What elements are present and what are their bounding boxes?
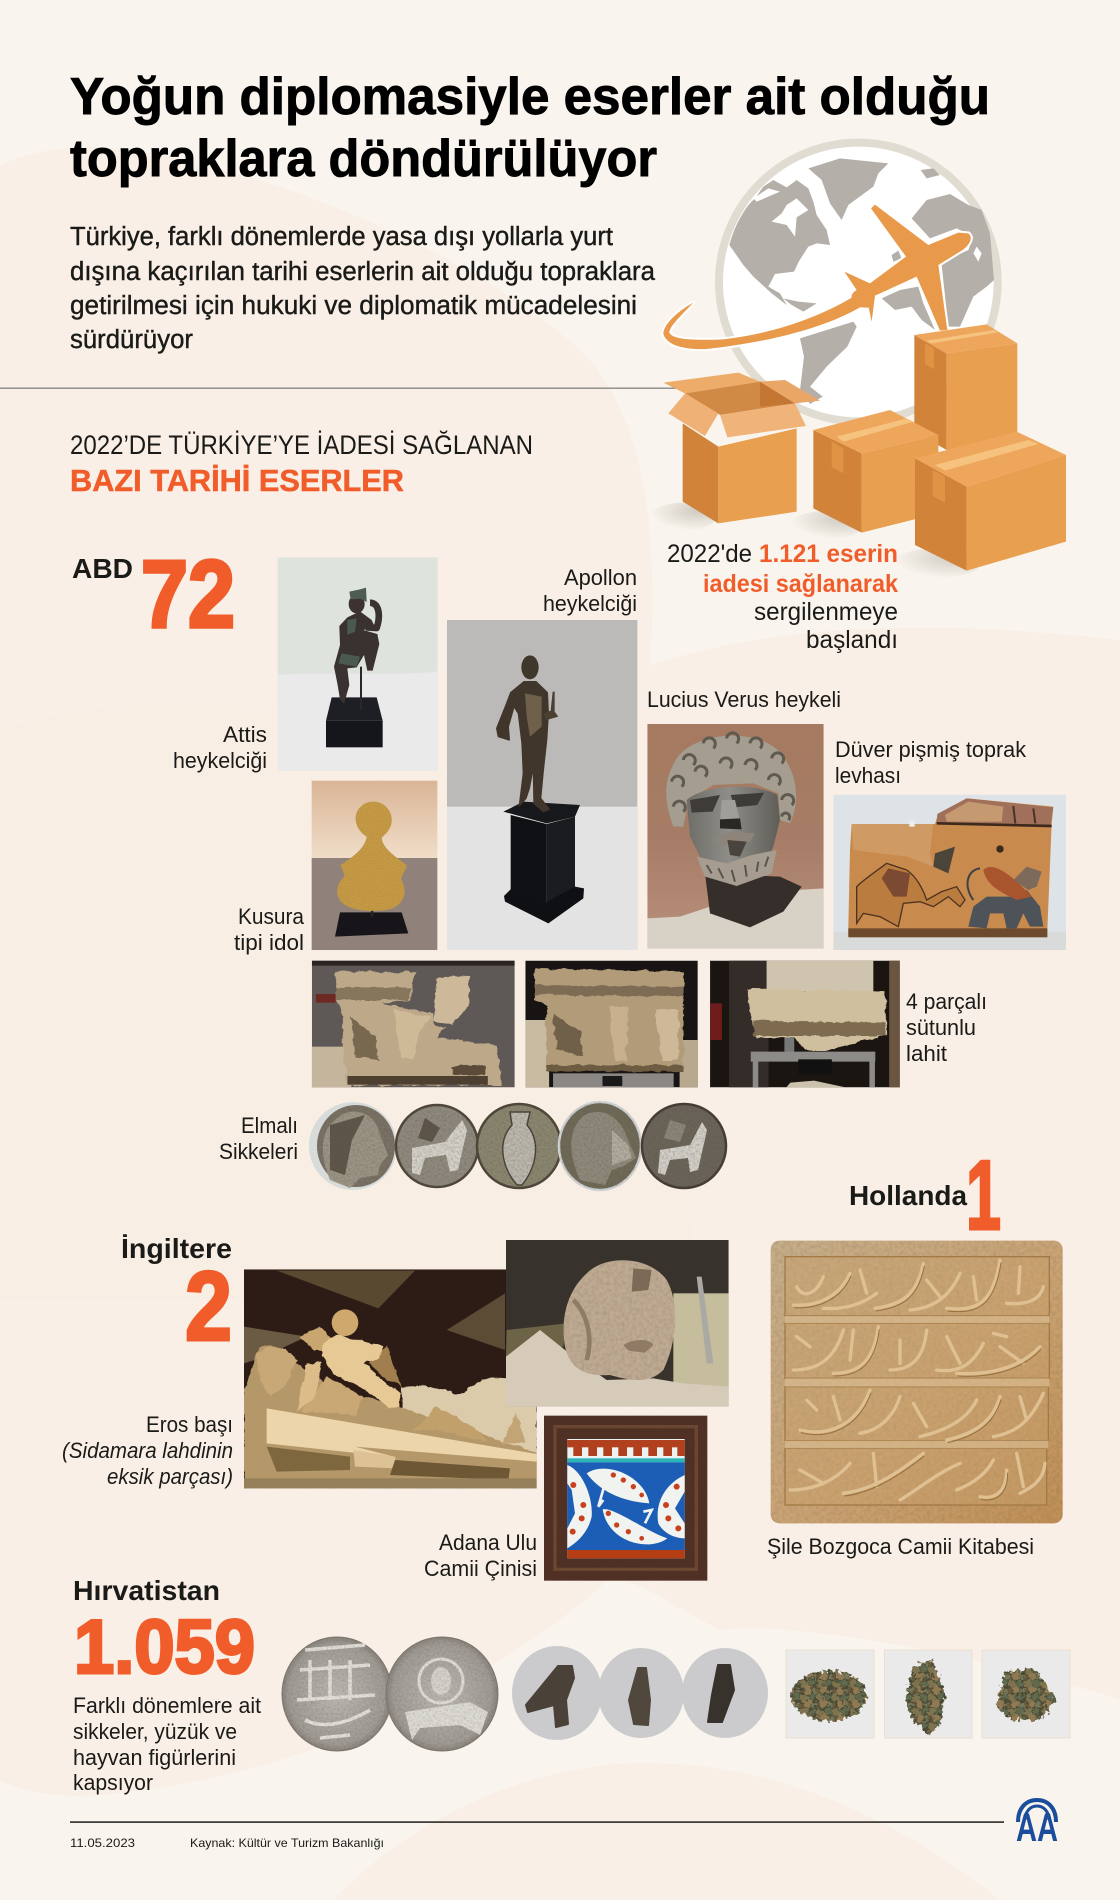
- label: Attis: [173, 722, 267, 773]
- icon: middle box: [813, 410, 938, 533]
- label: 4-piece sarcophagus: lahit: [906, 1041, 948, 1066]
- icon: AA logo: [1016, 1800, 1058, 1850]
- callout: 1.121 works: 2022'de: [667, 540, 752, 568]
- title: Yoğun diplomasiyle eserler ait olduğu: [70, 68, 990, 126]
- label: Elmalı coins: Sikkeleri: [219, 1139, 298, 1164]
- photo: sarcophagus fragment 2: [525, 961, 698, 1087]
- ABD count: ABD: [72, 553, 133, 584]
- coin 1: [309, 1102, 397, 1190]
- label: Apollon: [543, 565, 637, 616]
- label: Adana tile: Adana Ulu: [439, 1530, 537, 1555]
- coin 4: [559, 1102, 641, 1190]
- intro text: sürdürüyor: [70, 326, 194, 354]
- label: Düver plaque: Düver pişmiş toprak: [835, 737, 1027, 762]
- photo: silver coins: [282, 1637, 498, 1751]
- ABD count: [72, 541, 235, 648]
- label: Eros head: eksik parçası): [107, 1464, 233, 1489]
- title: topraklara döndürülüyor: [70, 130, 657, 188]
- Hollanda count: [849, 1140, 1001, 1250]
- photo: Şile Bozgoca mosque inscription: [771, 1241, 1063, 1523]
- intro text: getirilmesi için hukuki ve diplomatik mücadelesini: [70, 292, 637, 320]
- photo: Apollon statuette: [447, 620, 637, 950]
- text: Hırvatistan description: [73, 1693, 262, 1795]
- photo: Attis statuette: [278, 557, 438, 771]
- text: Hırvatistan description: sikkeler, yüzük ve: [73, 1719, 237, 1744]
- callout: 1.121 works: başlandı: [806, 626, 898, 654]
- label: Adana tile: Camii Çinisi: [424, 1556, 537, 1581]
- title: [70, 68, 990, 188]
- label: 4-piece sarcophagus: [906, 989, 987, 1066]
- photo: Lucius Verus head: [647, 724, 824, 949]
- İngiltere count: 2: [185, 1251, 232, 1361]
- inscription calligraphy: [790, 1260, 1045, 1500]
- illustration: globe, plane and boxes: [650, 143, 1066, 578]
- photo: Sidamara sarcophagus: [244, 1269, 537, 1488]
- text: Hırvatistan description: Farklı dönemlere ait: [73, 1693, 262, 1718]
- callout: 1.121 works: [667, 540, 898, 654]
- label: Kusura idol: tipi idol: [234, 930, 304, 955]
- label: Kusura idol: [234, 904, 304, 955]
- text: Hırvatistan description: kapsıyor: [73, 1770, 153, 1795]
- photo: sarcophagus fragment 1: [312, 961, 515, 1087]
- label: Attis: heykelciği: [173, 748, 267, 773]
- footer line: [70, 1821, 1004, 1823]
- photo: Kusura idol: [312, 781, 437, 950]
- callout: 1.121 works: sergilenmeye: [754, 598, 898, 626]
- icon: AA logo: AA: [1016, 1806, 1058, 1850]
- label: Eros head: (Sidamara lahdinin: [62, 1438, 233, 1463]
- label: Apollon: heykelciği: [543, 591, 637, 616]
- icon: tall box: [914, 324, 1017, 450]
- coin 5: [642, 1104, 726, 1188]
- label: Elmalı coins: Elmalı: [241, 1113, 298, 1138]
- label: Şile Bozgoca: Şile Bozgoca Camii Kitabesi: [767, 1534, 1034, 1559]
- coin 3: [477, 1104, 561, 1188]
- section heading: BAZI TARİHİ ESERLER: [70, 463, 404, 498]
- label: 4-piece sarcophagus: 4 parçalı: [906, 989, 987, 1014]
- label: Kusura idol: Kusura: [238, 904, 304, 929]
- photo: Düver terracotta plaque: [833, 795, 1066, 950]
- photo group: Elmalı coins: [309, 1102, 726, 1190]
- text: Hırvatistan description: hayvan figürlerini: [73, 1745, 236, 1770]
- photo: animal figurines: [512, 1646, 768, 1740]
- callout: 1.121 works: iadesi sağlanarak: [703, 570, 898, 598]
- label: Apollon: Apollon: [564, 565, 637, 590]
- photo group: 4-piece columned sarcophagus: [312, 961, 900, 1087]
- Hollanda count: Hollanda: [849, 1180, 967, 1211]
- footer: source: Kaynak: Kültür ve Turizm Bakanlığı: [190, 1836, 384, 1850]
- divider line: [0, 388, 690, 389]
- icon: airplane with trail: [663, 205, 971, 349]
- ABD count: 72: [141, 541, 235, 648]
- icon: globe: [719, 143, 998, 421]
- label: 4-piece sarcophagus: sütunlu: [906, 1015, 976, 1040]
- label: Lucius Verus: Lucius Verus heykeli: [647, 687, 841, 712]
- photo: sarcophagus fragment 3: [710, 961, 900, 1087]
- label: Attis: Attis: [223, 722, 267, 747]
- intro text: Türkiye, farklı dönemlerde yasa dışı yollarla yurt: [70, 223, 613, 251]
- label: Eros head: [62, 1412, 233, 1489]
- İngiltere count: İngiltere: [121, 1233, 232, 1264]
- callout: 1.121 works: 1.121 eserin: [759, 540, 898, 568]
- intro text: [70, 223, 656, 354]
- section heading: 2022’DE TÜRKİYE’YE İADESİ SAĞLANAN: [70, 430, 533, 460]
- photo: Adana Grand Mosque tile: [544, 1416, 707, 1581]
- icon: open box: [663, 373, 820, 523]
- label: Elmalı coins: [219, 1113, 298, 1164]
- coin 2: [396, 1105, 478, 1187]
- label: Adana tile: [424, 1530, 537, 1581]
- Hırvatistan count: 1.059: [74, 1605, 255, 1690]
- photo: coin hoards: [786, 1650, 1070, 1738]
- label: Düver plaque: [835, 737, 1027, 788]
- section heading: [70, 430, 533, 498]
- icon: box shadows: [650, 503, 980, 578]
- footer: date: 11.05.2023: [70, 1836, 135, 1850]
- Hollanda count: 1: [966, 1140, 1001, 1250]
- label: Düver plaque: levhası: [835, 763, 901, 788]
- photo: Eros head: [506, 1240, 729, 1407]
- İngiltere count: [121, 1233, 232, 1361]
- label: Eros head: Eros başı: [146, 1412, 233, 1437]
- hair: [666, 733, 796, 827]
- intro text: dışına kaçırılan tarihi eserlerin ait olduğu topraklara: [70, 258, 656, 286]
- Hırvatistan count: Hırvatistan: [73, 1575, 220, 1606]
- icon: front large box: [915, 432, 1066, 571]
